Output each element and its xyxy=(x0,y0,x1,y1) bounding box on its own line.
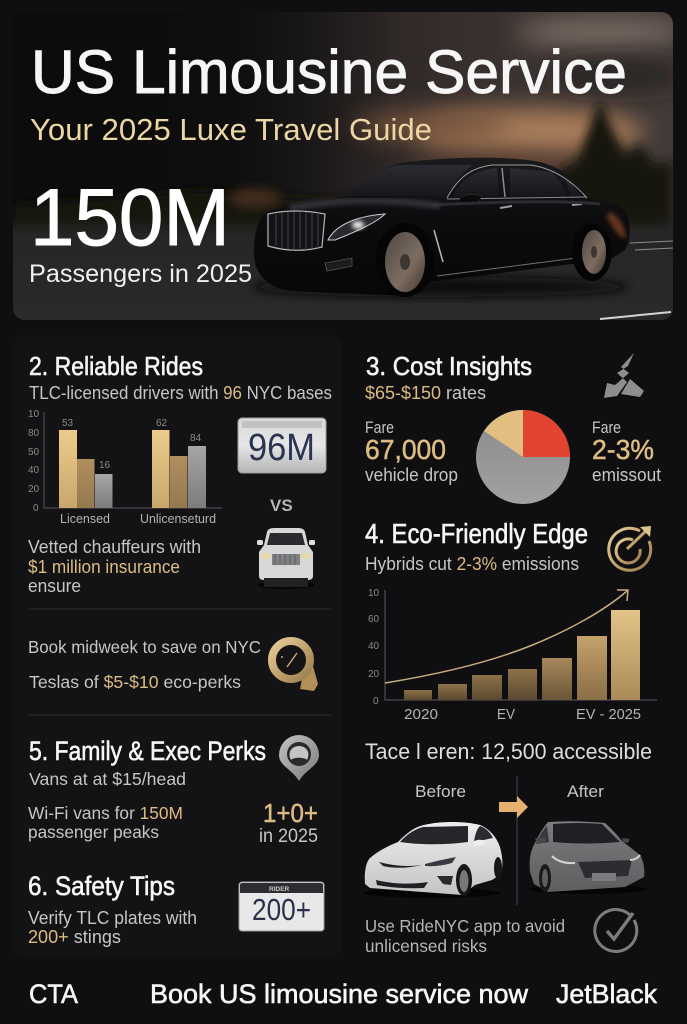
stat: right: emissout xyxy=(592,465,661,485)
subheading: $65-$150 rates xyxy=(365,383,486,403)
stat: left xyxy=(365,418,458,485)
title: US Limousine Service xyxy=(31,38,627,106)
hero photo background xyxy=(13,12,687,320)
bar chart: 20 xyxy=(28,484,40,495)
heading: 5. Family & Exec Perks xyxy=(29,736,266,766)
panel: left column xyxy=(12,335,343,957)
white car xyxy=(364,822,502,898)
icon: licence plate 200+: 200+ xyxy=(252,892,311,927)
body text: Wi-Fi vans for 150M xyxy=(28,803,183,823)
icon: licence plate 200+ xyxy=(239,882,324,931)
cta message: Book US limousine service now xyxy=(150,979,528,1009)
headlight xyxy=(328,214,385,240)
icon: licence plate 96M: 96M xyxy=(248,427,315,469)
stat: in 2025 xyxy=(259,826,318,847)
icon: location pin xyxy=(279,735,319,781)
stat: right: Fare xyxy=(592,418,621,437)
body text: vetted chauffeurs xyxy=(28,536,201,596)
tip text xyxy=(365,916,565,956)
panel background xyxy=(12,335,343,957)
bar chart: 62 xyxy=(156,418,168,429)
bar chart: growth: 40 xyxy=(368,641,380,652)
panel: before and after xyxy=(364,739,652,956)
tip text: Teslas of $5-$10 eco-perks xyxy=(29,672,241,692)
pie chart xyxy=(476,410,570,504)
body text: passenger peaks xyxy=(28,822,159,842)
bar chart xyxy=(28,409,222,526)
stat label: Passengers in 2025 xyxy=(29,260,252,288)
heading: Tace l eren: 12,500 accessible xyxy=(365,739,652,764)
body text: vetted chauffeurs: ensure xyxy=(28,575,81,596)
bar chart: growth: 0 xyxy=(373,696,379,707)
heading: 4. Eco-Friendly Edge xyxy=(365,518,588,549)
heading: 2. Reliable Rides xyxy=(29,351,203,381)
tip text: Book midweek to save on NYC xyxy=(28,637,261,657)
section: booking tip xyxy=(28,637,318,692)
panel: eco-friendly edge xyxy=(365,518,657,723)
section: family and exec perks xyxy=(28,735,319,847)
icon: licence plate 200+: RIDER xyxy=(269,886,290,893)
bar chart: 80 xyxy=(28,428,40,439)
body text xyxy=(28,908,197,947)
side mirror xyxy=(457,194,482,205)
stat: left: 67,000 xyxy=(365,434,446,465)
heading: 3. Cost Insights xyxy=(366,351,532,381)
bar chart: 40 xyxy=(28,465,40,476)
subheading: Vans at at $15/head xyxy=(29,769,186,789)
bar chart: 50 xyxy=(28,447,40,458)
bar chart: 16 xyxy=(99,460,111,471)
subheading: Hybrids cut 2-3% emissions xyxy=(365,554,579,574)
bar chart: Licensed xyxy=(60,511,110,526)
big stat: 150M xyxy=(30,173,230,263)
stat: left: Fare xyxy=(365,418,394,437)
grille xyxy=(268,211,325,250)
limousine photo xyxy=(250,158,630,297)
trend arrow xyxy=(385,590,628,683)
tip text: Use RideNYC app to avoid xyxy=(365,916,565,936)
body text: vetted chauffeurs: $1 million insurance xyxy=(28,556,180,577)
label: after: After xyxy=(567,783,605,801)
bar chart: growth: 20 xyxy=(368,669,380,680)
panel: hero xyxy=(13,12,687,320)
panel: cost insights xyxy=(365,351,661,504)
stat: right xyxy=(592,418,661,485)
bar chart: growth: 2020 xyxy=(404,707,438,723)
stat: right: 2-3% xyxy=(592,434,654,465)
tip text xyxy=(28,637,261,692)
cta label: CTA xyxy=(29,979,78,1009)
body text: Verify TLC plates with xyxy=(28,908,197,928)
bar chart: 53 xyxy=(62,418,74,429)
icon: target with arrow xyxy=(609,526,651,570)
call to action bar xyxy=(29,979,657,1009)
bar chart: growth: EV xyxy=(497,707,515,723)
section: safety tips xyxy=(28,871,324,947)
tip text: unlicensed risks xyxy=(365,936,487,956)
heading: 6. Safety Tips xyxy=(28,871,175,901)
front wheel xyxy=(376,223,434,297)
section: reliable rides xyxy=(28,351,332,596)
label: before: Before xyxy=(415,783,466,801)
bar chart: 0 xyxy=(33,503,39,514)
body text: 200+ stings xyxy=(28,927,121,947)
icon: check circle xyxy=(595,909,637,951)
subheading: TLC-licensed drivers with 96 NYC bases xyxy=(29,383,332,403)
rear wheel xyxy=(572,223,612,281)
bar chart: 84 xyxy=(190,433,202,444)
body text xyxy=(28,803,183,842)
bar chart: Unlicenseturd xyxy=(140,511,216,526)
subtitle: Your 2025 Luxe Travel Guide xyxy=(30,112,432,147)
vs label: VS xyxy=(270,496,293,515)
stat: 1+0+ xyxy=(263,798,318,828)
stat: left: vehicle drop xyxy=(365,465,458,485)
icon: magnifier xyxy=(272,641,318,691)
gray car xyxy=(530,821,646,894)
icon: white SUV xyxy=(257,528,315,589)
bar chart: growth: 10 xyxy=(368,588,380,599)
bar chart: growth: 60 xyxy=(368,614,380,625)
bar chart: growth: EV - 2025 xyxy=(576,707,641,723)
icon: licence plate 96M xyxy=(238,418,326,473)
arrow xyxy=(499,796,528,818)
stat xyxy=(259,798,318,847)
brand: JetBlack xyxy=(556,979,657,1009)
bar chart: growth xyxy=(368,588,657,723)
bar chart: 10 xyxy=(28,409,40,420)
body text: vetted chauffeurs: Vetted chauffeurs with xyxy=(28,536,201,557)
icon: wrench xyxy=(604,353,644,398)
